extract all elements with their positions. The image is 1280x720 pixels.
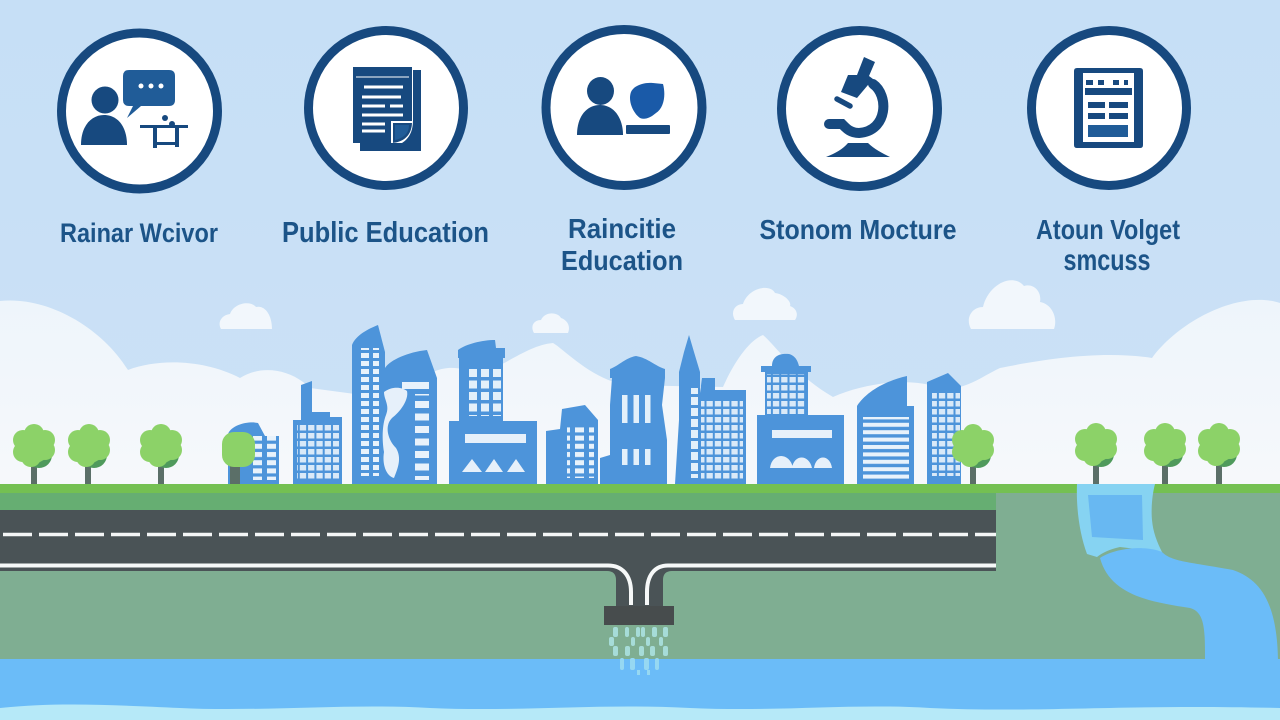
label 2: Public Education — [282, 217, 489, 249]
icon: person with speech bubble — [81, 70, 188, 148]
pool water — [1088, 495, 1143, 540]
building: block with tower — [757, 354, 844, 484]
tree 4 — [222, 432, 255, 484]
background hills — [0, 300, 1280, 484]
water surface — [0, 659, 1280, 720]
lane dashes — [3, 533, 996, 536]
label 3: Raincitie — [568, 213, 676, 244]
river crack window — [383, 388, 407, 478]
left kerb line — [0, 566, 631, 605]
small clouds — [220, 280, 1055, 333]
road — [0, 510, 996, 606]
icon: microscope — [826, 57, 890, 157]
building: civic block — [449, 340, 537, 484]
panel: Atoun Volget — [1032, 30, 1186, 277]
panel: Raincitie Education — [546, 30, 702, 276]
drain drips — [609, 627, 668, 675]
soil — [0, 484, 1280, 664]
tree 3 — [140, 424, 182, 484]
foam — [0, 705, 1280, 720]
grass strip — [0, 484, 1280, 510]
tree 8 — [1198, 423, 1240, 484]
building: curved office — [857, 376, 914, 484]
cloud 2 — [532, 313, 569, 333]
building: office with antenna — [293, 381, 342, 484]
label 1: Rainar Wcivor — [60, 218, 218, 248]
building: ornate hall — [600, 356, 667, 484]
icon ring 1 — [62, 33, 218, 189]
city skyline — [228, 325, 961, 484]
panel: Rainar Wcivor — [60, 33, 218, 248]
panel: Public Education — [282, 30, 489, 249]
drain head — [604, 606, 674, 625]
cloud 3 — [733, 288, 797, 320]
icon: person with globe — [577, 77, 670, 135]
right kerb line — [647, 566, 996, 605]
icon ring 2 — [308, 30, 464, 186]
tree 6 — [1075, 423, 1117, 484]
tree 5 — [952, 424, 994, 484]
label 4: Stonom Mocture — [760, 214, 956, 245]
cloud 4 — [969, 280, 1055, 329]
building: narrow tower — [927, 373, 961, 484]
icon ring 5 — [1032, 30, 1186, 186]
panel: Stonom Mocture — [760, 30, 956, 245]
label 3 second line: Education — [561, 245, 683, 276]
label 5: Atoun Volget — [1036, 214, 1180, 245]
cloud 1 — [220, 303, 272, 329]
tree 1 — [13, 424, 55, 484]
river channel — [1077, 484, 1278, 660]
building: twin tower — [352, 325, 437, 484]
building: small rear — [228, 422, 279, 484]
tree 7 — [1144, 423, 1186, 484]
icon: data tablet — [1074, 68, 1143, 148]
building: spire tower — [675, 335, 746, 484]
icon ring 3 — [546, 30, 702, 186]
icon: notebook — [353, 67, 421, 151]
river flow — [1100, 548, 1278, 660]
label 5 second line: smcuss — [1064, 244, 1150, 277]
trees — [13, 423, 1240, 484]
tree 2 — [68, 424, 110, 484]
icon ring 4 — [782, 30, 938, 186]
pool border — [1077, 484, 1162, 557]
building: mid tower — [546, 405, 598, 484]
